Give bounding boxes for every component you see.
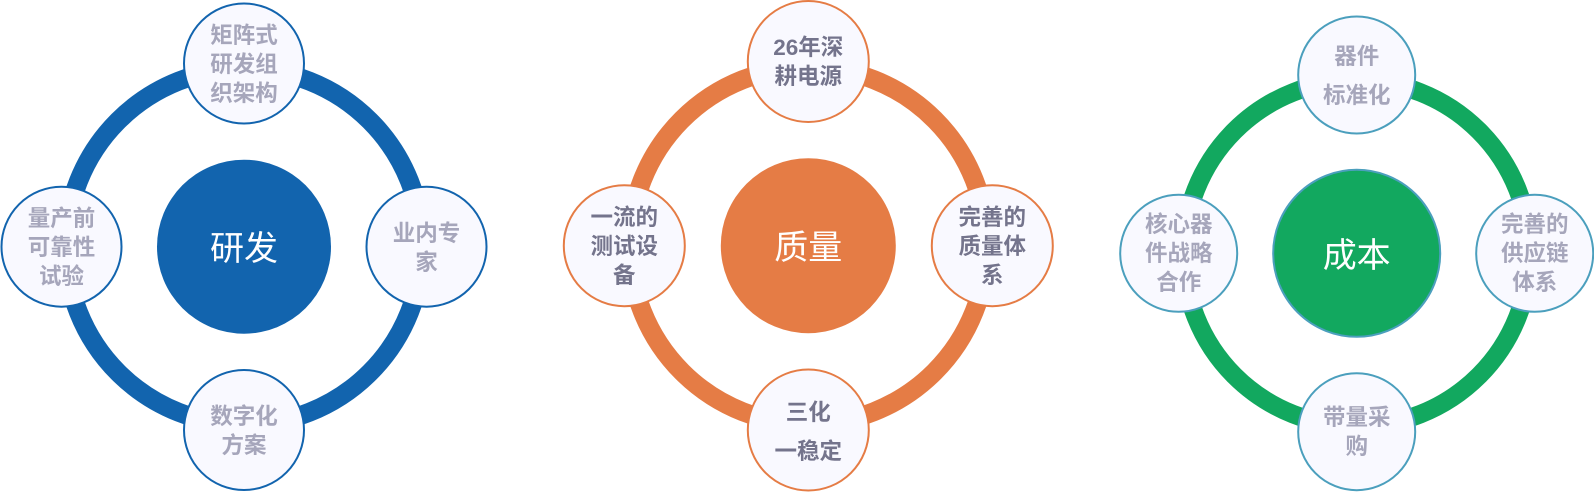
node: 26年深耕电源: 26年深 — [773, 35, 843, 60]
node: 一流的测试设备: 测试设 — [591, 234, 658, 259]
node: 业内专家: 业内专 — [393, 221, 460, 246]
node: 一流的测试设备: 一流的 — [591, 205, 658, 230]
node: 三化一稳定: 三化 — [786, 400, 831, 425]
node: 完善的质量体系: 完善的 — [959, 205, 1026, 230]
node: 完善的供应链体系: 供应链 — [1501, 240, 1569, 266]
ring: 成本 — [1184, 80, 1530, 426]
node: 量产前可靠性试验: 量产前 — [28, 206, 95, 231]
node: 核心器件战略合作: 件战略 — [1145, 241, 1213, 266]
node: 数字化方案: 数字化 — [210, 404, 278, 429]
node: 核心器件战略合作 — [1120, 195, 1237, 312]
center circle: 成本 — [1273, 170, 1440, 337]
node: 矩阵式研发组织架构: 织架构 — [210, 81, 278, 106]
node: 完善的质量体系 — [932, 185, 1053, 306]
node: 核心器件战略合作: 合作 — [1156, 270, 1201, 295]
node: 器件标准化 — [1298, 16, 1415, 134]
node: 业内专家: 家 — [415, 249, 438, 275]
node: 矩阵式研发组织架构: 研发组 — [210, 52, 278, 77]
panel: 研发 cycle — [2, 4, 486, 490]
node: 26年深耕电源: 耕电源 — [775, 64, 843, 89]
center circle: 质量 — [721, 158, 896, 333]
ring: 研发 — [66, 69, 422, 425]
center circle: 研发: 研发 — [210, 230, 278, 268]
node: 完善的供应链体系: 完善的 — [1501, 212, 1568, 237]
center circle: 成本: 成本 — [1323, 237, 1391, 275]
panel: 质量 cycle — [564, 1, 1053, 490]
center circle: 研发 — [157, 160, 331, 334]
node: 一流的测试设备 — [564, 185, 685, 306]
node: 器件标准化: 器件 — [1334, 44, 1379, 69]
node: 量产前可靠性试验: 可靠性 — [28, 235, 95, 260]
node: 器件标准化: 标准化 — [1323, 83, 1390, 108]
node: 矩阵式研发组织架构: 矩阵式 — [210, 23, 278, 48]
node: 完善的质量体系: 系 — [981, 263, 1004, 288]
node: 三化一稳定: 一稳定 — [775, 439, 842, 464]
node: 量产前可靠性试验: 试验 — [39, 263, 84, 289]
node: 一流的测试设备: 备 — [613, 263, 636, 288]
node: 完善的供应链体系: 体系 — [1512, 270, 1557, 295]
node: 数字化方案 — [184, 370, 304, 490]
ring: 质量 — [630, 67, 987, 424]
node: 带量采购 — [1298, 373, 1415, 490]
node: 核心器件战略合作: 核心器 — [1145, 212, 1213, 237]
node: 带量采购: 带量采 — [1323, 405, 1390, 430]
center circle: 质量: 质量 — [774, 229, 842, 267]
node: 业内专家 — [366, 187, 486, 307]
node: 数字化方案: 方案 — [221, 432, 267, 458]
node: 26年深耕电源 — [748, 1, 869, 122]
node: 矩阵式研发组织架构 — [184, 4, 304, 124]
node: 完善的供应链体系 — [1476, 195, 1593, 312]
node: 三化一稳定 — [748, 370, 869, 490]
node: 带量采购: 购 — [1345, 434, 1368, 459]
panel: 成本 cycle — [1120, 16, 1593, 490]
node: 完善的质量体系: 质量体 — [959, 234, 1027, 259]
node: 量产前可靠性试验 — [2, 187, 122, 307]
